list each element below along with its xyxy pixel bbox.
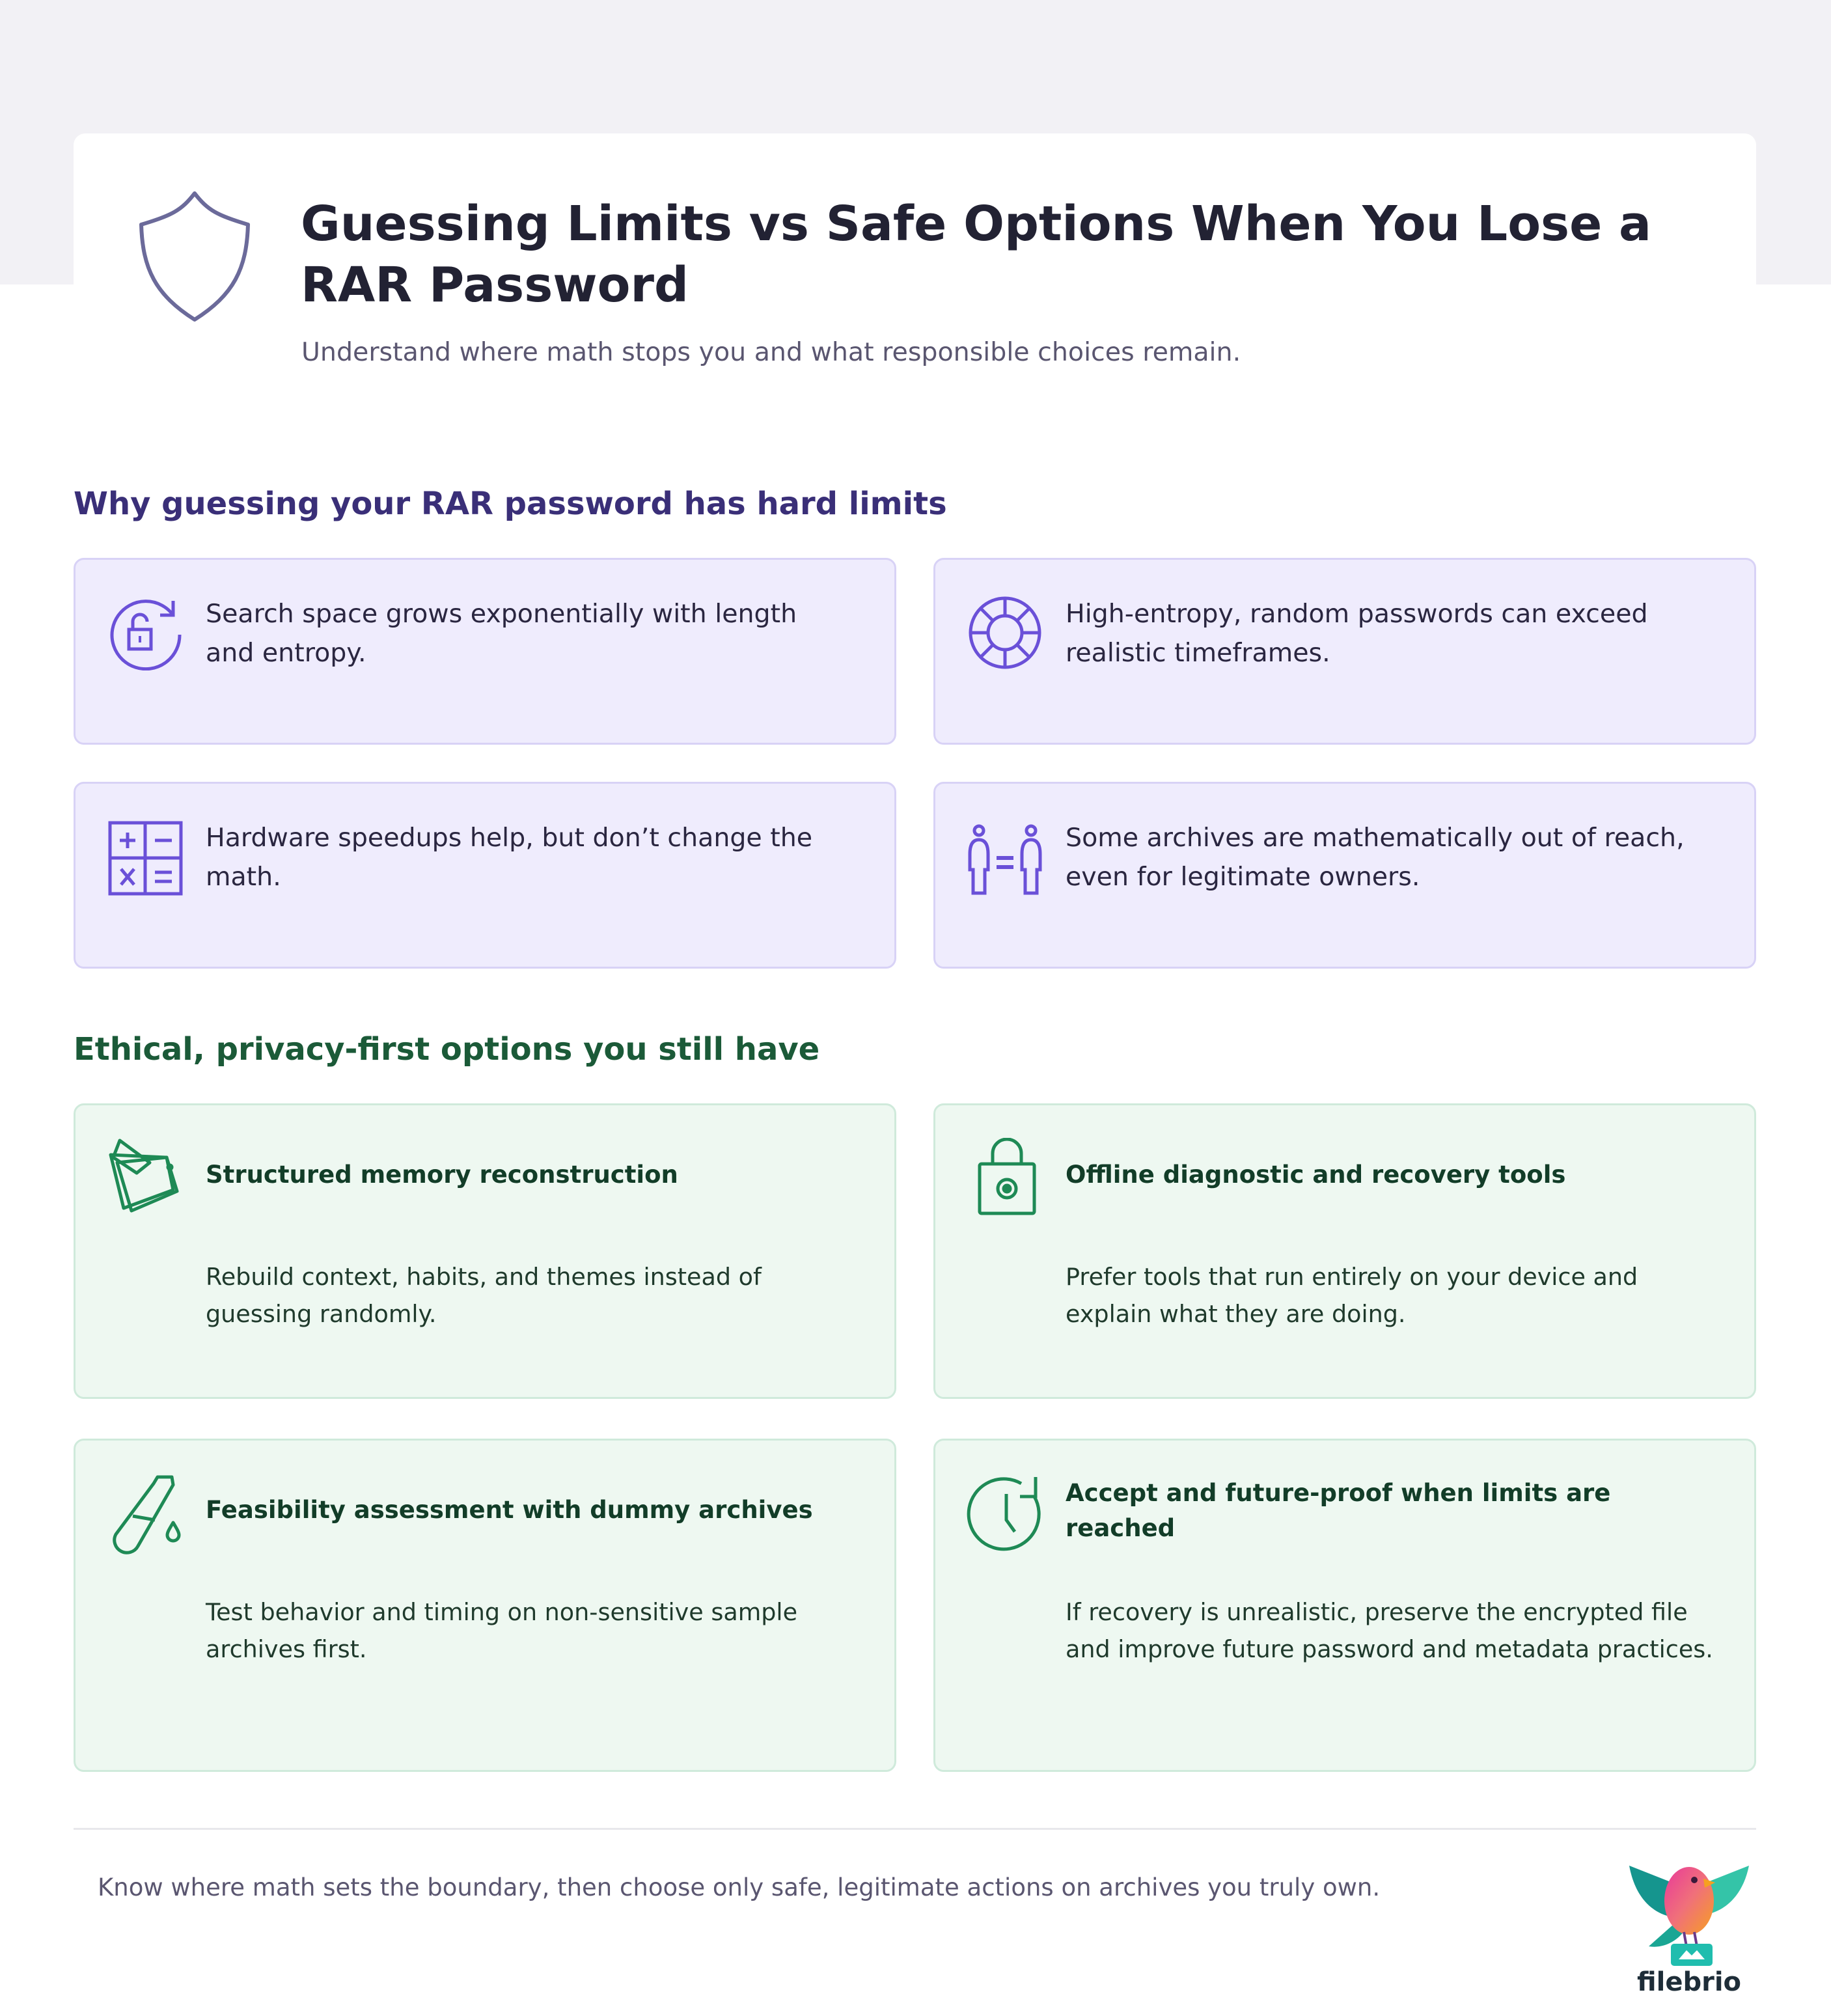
footer text: Know where math sets the boundary, then choose only safe, legitimate actions on archives you truly own.: [98, 1873, 1380, 1901]
title: Feasibility assessment with dummy archives: [206, 1496, 813, 1524]
icon: calculator: [108, 822, 182, 896]
heading: why guessing: Why guessing your RAR password has hard limits: [74, 486, 947, 522]
desc: Prefer tools that run entirely on your device and explain what they are doing.: [1066, 1263, 1638, 1328]
panel: high entropy: [933, 558, 1756, 745]
logo: filebrio: filebrio: [1637, 1967, 1741, 1997]
panel: memory reconstruction: [74, 1103, 896, 1399]
panel: hardware: [74, 782, 896, 969]
desc: Test behavior and timing on non-sensitive sample archives first.: [206, 1598, 797, 1663]
panel: out of reach: [933, 782, 1756, 969]
panel: offline tools: [933, 1103, 1756, 1399]
title: Guessing Limits vs Safe Options When You Lose a RAR Password: [301, 196, 1651, 313]
icon: rotate lock: [111, 600, 181, 670]
heading: ethical options: Ethical, privacy-first options you still have: [74, 1031, 819, 1068]
text: Hardware speedups help, but don’t change the math.: [206, 823, 812, 892]
subtitle: Understand where math stops you and what responsible choices remain.: [301, 337, 1241, 367]
desc: If recovery is unrealistic, preserve the encrypted file and improve future password and metadata practices.: [1066, 1598, 1713, 1663]
panel: feasibility: [74, 1439, 896, 1772]
logo: filebrio: [1629, 1866, 1749, 1997]
icon: clock: [967, 1477, 1041, 1551]
top band: [0, 0, 1831, 284]
panel: accept and future-proof: [933, 1439, 1756, 1772]
icon: test tube: [113, 1475, 181, 1554]
icon: wheel: [969, 596, 1041, 669]
text: Search space grows exponentially with length and entropy.: [206, 599, 797, 668]
desc: Rebuild context, habits, and themes instead of guessing randomly.: [206, 1263, 762, 1328]
icon: lock with eye: [978, 1138, 1036, 1215]
icon: people equal: [969, 824, 1041, 894]
text: High-entropy, random passwords can exceed realistic timeframes.: [1066, 599, 1648, 668]
title: Accept and future-proof when limits are reached: [1066, 1479, 1610, 1542]
text: Some archives are mathematically out of reach, even for legitimate owners.: [1066, 823, 1685, 892]
icon: shield: [139, 191, 250, 322]
divider: [74, 1828, 1756, 1830]
icon: cards: [109, 1139, 179, 1212]
title: Structured memory reconstruction: [206, 1161, 678, 1189]
title: Offline diagnostic and recovery tools: [1066, 1161, 1565, 1189]
panel: search space: [74, 558, 896, 745]
header card: [74, 133, 1756, 446]
